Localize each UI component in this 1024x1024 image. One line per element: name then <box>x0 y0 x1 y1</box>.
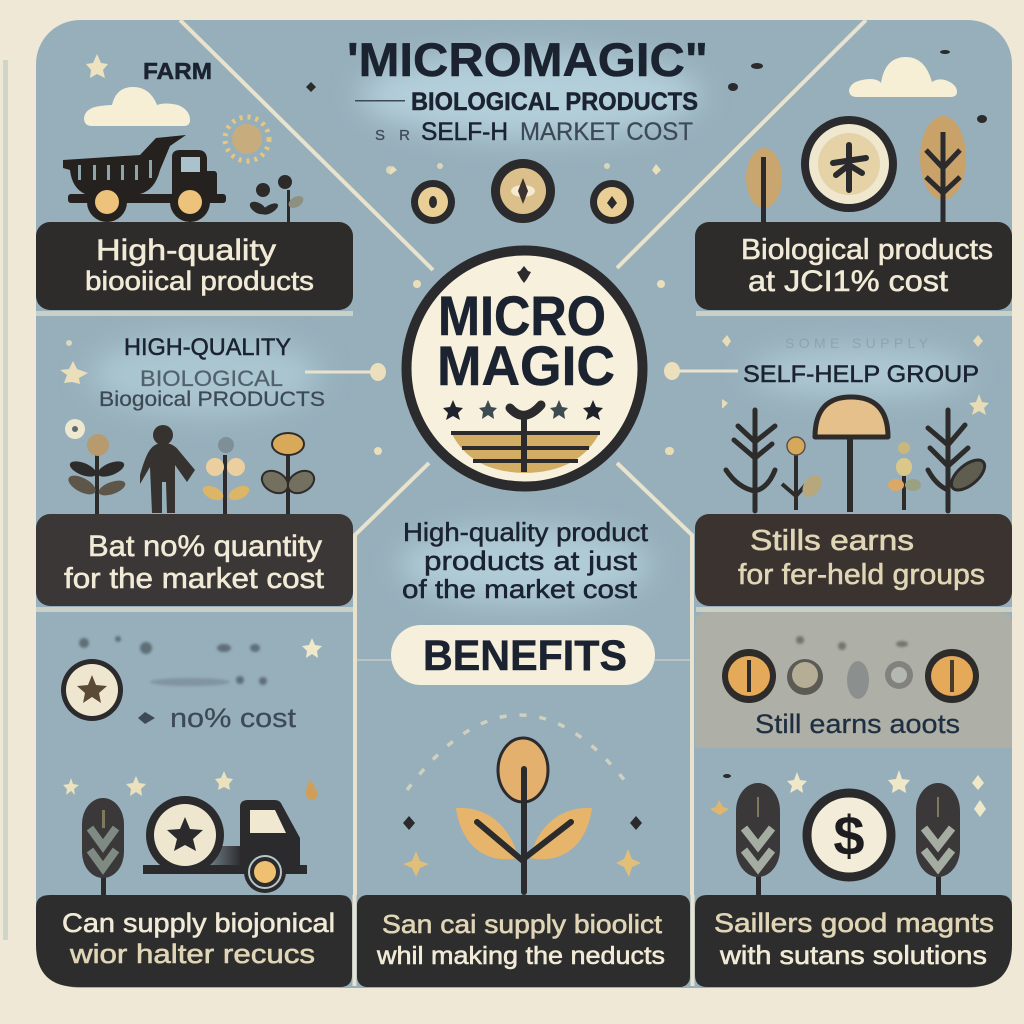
text: central benefit statement: of the market cost <box>402 574 638 604</box>
icon: sun <box>225 117 269 161</box>
text: central benefit statement: products at just <box>424 546 638 576</box>
text box: bottom left: Can supply biojonical <box>62 908 335 938</box>
text box: middle right: Stills earns <box>750 525 914 557</box>
text: left lower panel with seal <box>61 636 322 733</box>
text: central benefit statement: High-quality product <box>403 517 649 547</box>
text: left lower panel with seal: no% cost <box>170 703 297 733</box>
title: BIOLOGICAL PRODUCTS <box>411 88 698 116</box>
icon: lower right stars <box>710 770 986 817</box>
text: high-quality biological products: HIGH-QUALITY <box>124 334 291 361</box>
title <box>347 33 708 146</box>
icon: plants and person <box>65 425 318 514</box>
benefits pill <box>391 625 655 685</box>
icon: title sparkles <box>374 163 673 455</box>
panel: self-help tinted band <box>695 612 1012 748</box>
text: self-help group: SOME SUPPLY <box>785 335 929 351</box>
connector lines <box>180 20 866 986</box>
icon: left cloud <box>84 87 190 126</box>
text box: middle left: Bat no% quantity <box>88 530 322 563</box>
text box: middle right: for fer-held groups <box>738 559 985 591</box>
central badge: MICRO <box>438 284 606 347</box>
central badge: MAGIC <box>437 334 615 397</box>
text: self-help group: SELF-HELP GROUP <box>743 361 979 388</box>
central badge <box>406 250 642 486</box>
icon: dollar coin and trees: $ <box>833 804 865 867</box>
text box: bottom right <box>695 895 1012 987</box>
icon: small circle right <box>590 180 634 224</box>
icon: right sparkles <box>666 335 989 455</box>
icon: small circle left <box>411 180 455 224</box>
text: high-quality biological products: Biogoical PRODUCTS <box>99 388 325 411</box>
text box: top left <box>36 222 353 310</box>
icon group: self-help coins row <box>722 636 979 703</box>
connector dot left <box>370 363 386 381</box>
title: S R <box>375 127 410 144</box>
text box: bottom middle: whil making the neducts <box>376 942 665 970</box>
text box: middle left: for the market cost <box>64 563 324 595</box>
text box: bottom middle <box>357 895 690 987</box>
text: high-quality biological products <box>99 334 325 411</box>
icon: small farm plants <box>248 175 305 223</box>
icon: dollar coin and trees <box>736 783 960 895</box>
text: central benefit statement <box>402 517 649 604</box>
farm heading: FARM <box>143 58 212 84</box>
icon: central growing plant <box>403 715 642 895</box>
text box: top right: Biological products <box>741 234 993 266</box>
icon: delivery truck with star <box>143 796 307 893</box>
icon: right seal and trees <box>746 116 966 223</box>
text box: middle left <box>36 514 353 606</box>
text box: top right: at JCI1% cost <box>748 265 949 298</box>
icon: dump truck <box>63 135 226 222</box>
icon: wheat tree left <box>82 798 124 895</box>
text box: middle right <box>695 514 1012 606</box>
icon: right cloud <box>849 57 957 97</box>
benefits pill: BENEFITS <box>423 632 627 680</box>
icon: lower left stars <box>63 771 318 800</box>
text box: top left: High-quality <box>96 234 276 267</box>
text: still earns: Still earns aoots <box>755 709 960 739</box>
text box: top right <box>695 222 1012 310</box>
icon: left sparkles <box>60 340 88 439</box>
text box: bottom middle: San cai supply bioolict <box>382 909 663 939</box>
text box: bottom right: Saillers good magnts <box>714 908 994 938</box>
text: self-help group <box>743 335 979 388</box>
icon: left star <box>86 54 108 78</box>
title: SELF-H <box>421 118 508 146</box>
text box: top left: biooiical products <box>85 266 314 296</box>
icon: left dark specks <box>306 50 987 123</box>
icon: large circle middle <box>491 159 555 223</box>
text box: bottom right: with sutans solutions <box>719 940 987 970</box>
text: high-quality biological products: BIOLOGICAL <box>140 366 283 391</box>
icon: right plants and mushroom <box>726 397 990 512</box>
text box: bottom left <box>36 895 352 987</box>
title: 'MICROMAGIC" <box>347 33 708 86</box>
text box: bottom left: wior halter recucs <box>69 939 315 969</box>
title: MARKET COST <box>520 118 693 146</box>
connector dot right <box>664 362 680 380</box>
